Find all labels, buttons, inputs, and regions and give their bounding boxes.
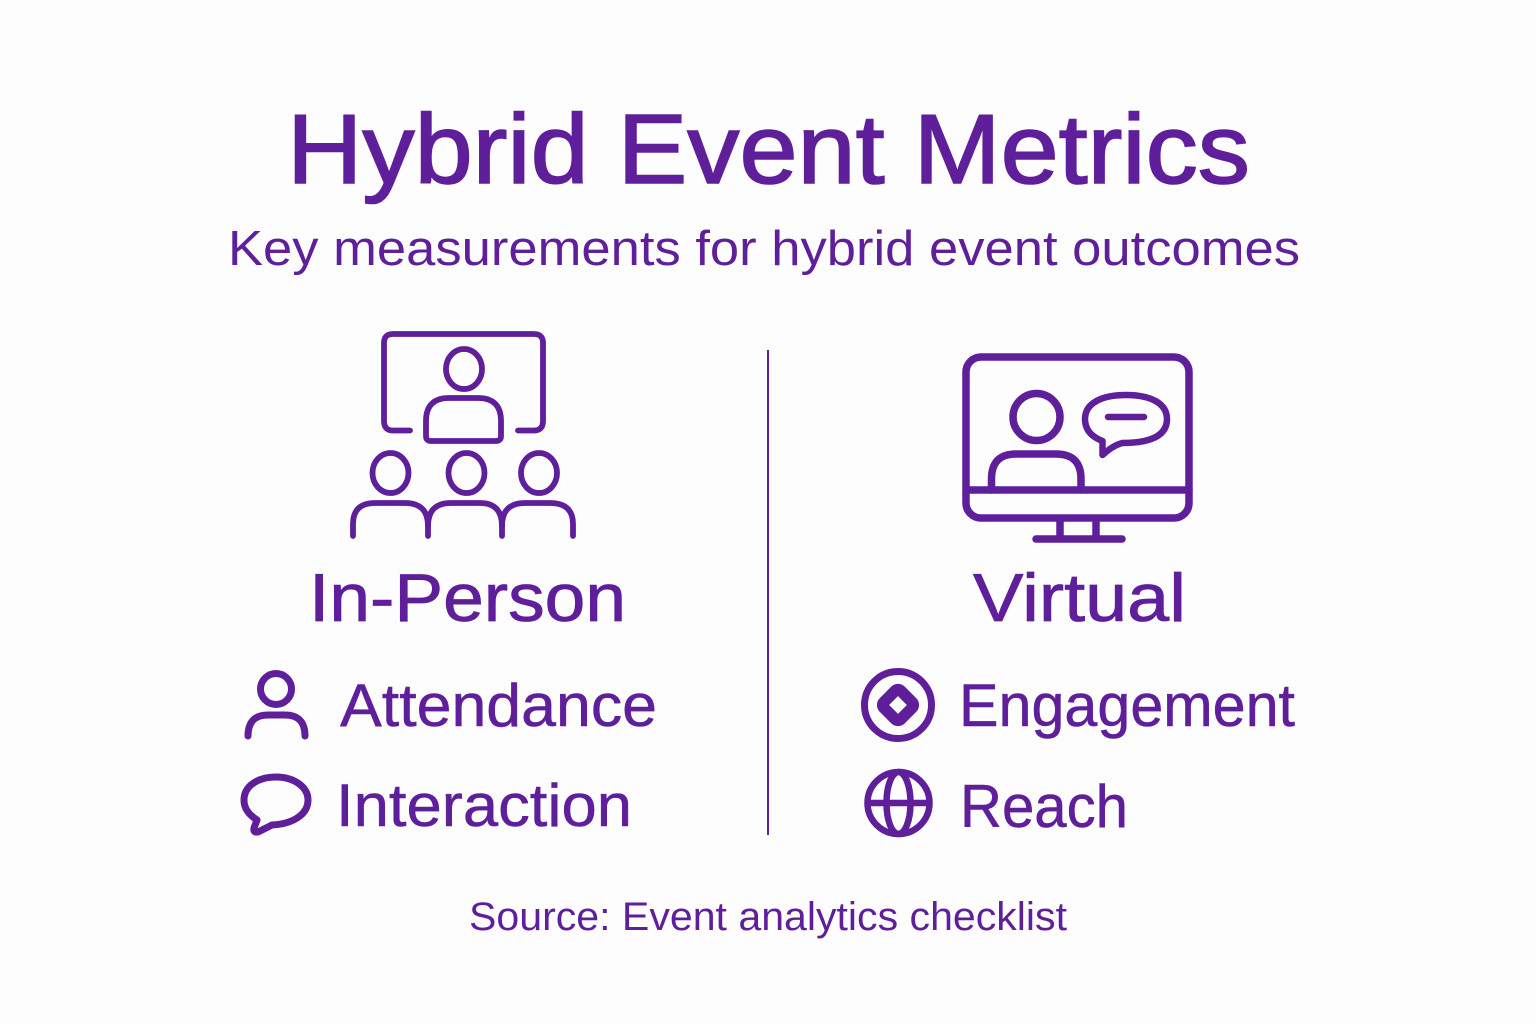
icon: reach globe [868, 772, 930, 834]
subtitle: Key measurements for hybrid event outcomes [228, 222, 1300, 276]
panel: in-person [244, 334, 657, 839]
title: Hybrid Event Metrics [287, 94, 1250, 204]
icon: interaction speech bubble [244, 777, 308, 832]
panel: virtual [864, 357, 1295, 840]
label: engagement: Engagement [959, 672, 1295, 739]
source note: Source: Event analytics checklist [469, 895, 1067, 939]
icon: presenter on screen with audience [353, 334, 573, 536]
icon: engagement target [864, 672, 932, 738]
heading: virtual: Virtual [973, 560, 1186, 636]
heading: in-person: In-Person [309, 560, 626, 636]
icon: attendance person [248, 674, 305, 736]
label: interaction: Interaction [336, 772, 632, 839]
label: attendance: Attendance [340, 672, 657, 739]
icon: monitor with speaker and chat [966, 357, 1189, 539]
label: reach: Reach [960, 773, 1128, 840]
divider [767, 350, 769, 835]
